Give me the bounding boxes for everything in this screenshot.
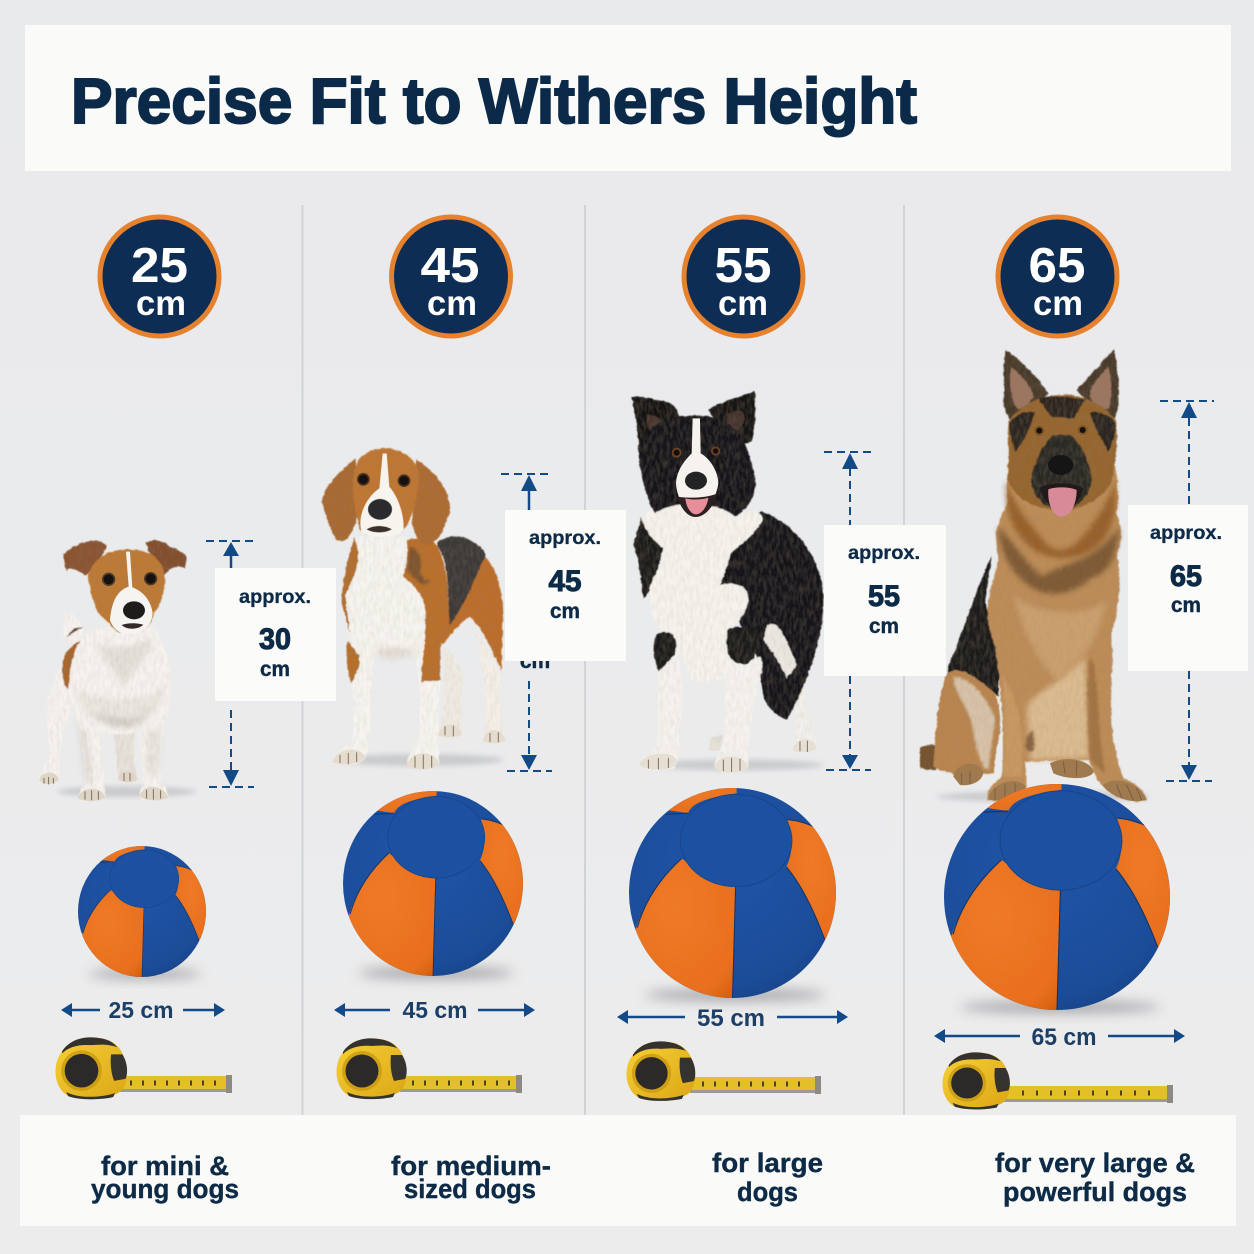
badge: 25 cm — [100, 217, 219, 336]
tape measure 4 — [943, 1052, 1173, 1109]
width dimension: 55 cm — [617, 1005, 848, 1032]
tape measure 1 — [55, 1037, 232, 1099]
caption: mini dogs — [91, 1151, 239, 1204]
height label: approx. 45 cm: 45 — [548, 565, 582, 598]
height label: approx. 55 cm — [824, 525, 946, 676]
height label: approx. 65 cm: approx. — [1150, 522, 1222, 544]
height marker: 55 cm — [824, 452, 871, 770]
illustration: jack russell terrier — [38, 540, 197, 802]
width dimension: 55 cm: 55 cm — [697, 1005, 765, 1032]
stray cm behind label: cm — [520, 650, 550, 673]
height marker: 45 cm — [501, 474, 552, 771]
height label: approx. 55 cm: approx. — [848, 542, 920, 564]
ball: 55 cm — [625, 782, 842, 1002]
caption: medium dogs: sized dogs — [404, 1174, 536, 1204]
height label: approx. 55 cm: 55 — [868, 580, 900, 613]
caption: mini dogs: young dogs — [91, 1174, 239, 1204]
badge: 55 cm: 55 — [714, 239, 772, 293]
illustration: german shepherd — [920, 349, 1150, 802]
bottom caption panel — [20, 1115, 1236, 1226]
column dividers — [302, 205, 904, 1115]
ball: 65 cm — [939, 777, 1177, 1015]
width dimension: 25 cm — [61, 997, 225, 1023]
height label: approx. 55 cm: cm — [869, 615, 899, 638]
width dimension: 65 cm: 65 cm — [1032, 1024, 1096, 1051]
title panel — [25, 25, 1231, 171]
caption: medium dogs — [391, 1151, 551, 1204]
height label: approx. 45 cm: cm — [550, 600, 580, 623]
badge: 25 cm: cm — [136, 284, 186, 323]
width dimension: 45 cm: 45 cm — [402, 997, 468, 1023]
badge: 45 cm — [392, 217, 510, 336]
height label: approx. 45 cm — [505, 510, 626, 661]
height label: approx. 45 cm: approx. — [529, 527, 601, 549]
illustration: border collie — [632, 391, 823, 773]
ball: 25 cm — [75, 842, 210, 980]
ball: 45 cm — [339, 785, 528, 980]
width dimension: 65 cm — [934, 1024, 1185, 1051]
height label: approx. 65 cm: cm — [1171, 594, 1201, 617]
tape measure 2 — [336, 1038, 522, 1099]
caption: large dogs: dogs — [737, 1177, 798, 1207]
badge: 45 cm: 45 — [420, 239, 480, 293]
caption: very large dogs: for very large & — [995, 1148, 1195, 1178]
caption: large dogs — [712, 1148, 823, 1207]
width dimension: 25 cm: 25 cm — [108, 997, 174, 1023]
height marker: 30 cm — [206, 541, 254, 787]
height label: approx. 65 cm — [1128, 505, 1248, 671]
badge: 55 cm: cm — [718, 284, 768, 323]
caption: very large dogs — [995, 1148, 1195, 1207]
height label: approx. 30 cm: 30 — [259, 623, 291, 656]
badge: 55 cm — [684, 217, 803, 336]
height label: approx. 30 cm — [215, 568, 336, 701]
title: Precise Fit to Withers Height — [71, 65, 917, 137]
tape measure 3 — [627, 1041, 821, 1101]
caption: mini dogs: for mini & — [101, 1151, 229, 1181]
height label: approx. 65 cm: 65 — [1170, 560, 1202, 593]
width dimension: 45 cm — [334, 997, 535, 1023]
caption: large dogs: for large — [712, 1148, 823, 1178]
caption: medium dogs: for medium- — [391, 1151, 551, 1181]
illustration: beagle — [322, 448, 506, 769]
height label: approx. 30 cm: cm — [260, 658, 290, 681]
badge: 45 cm: cm — [427, 284, 477, 323]
badge: 65 cm: cm — [1033, 284, 1083, 323]
badge: 65 cm: 65 — [1028, 239, 1086, 293]
caption: very large dogs: powerful dogs — [1003, 1177, 1187, 1207]
badge: 65 cm — [998, 217, 1117, 336]
badge: 25 cm: 25 — [131, 239, 188, 293]
height marker: 65 cm — [1160, 401, 1214, 781]
height label: approx. 30 cm: approx. — [239, 586, 311, 608]
